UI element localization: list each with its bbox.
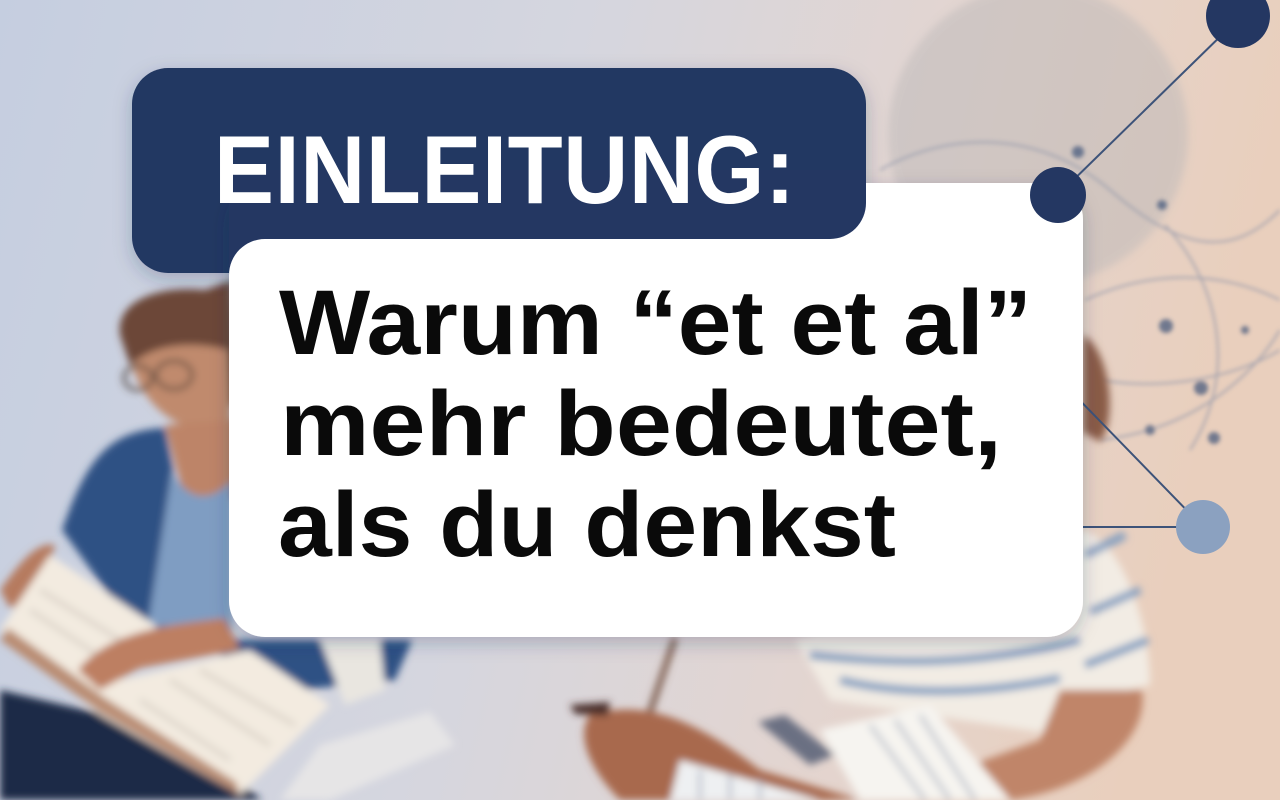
title line 1: Warum “et et al”: [279, 272, 1032, 374]
heading: Einleitung: EINLEITUNG:: [214, 116, 795, 224]
heading label panel: [132, 68, 866, 273]
pen: [650, 638, 675, 712]
left person hair: [120, 280, 240, 420]
left person jacket: [62, 428, 412, 690]
chair: [280, 712, 455, 800]
right person figure, blurred: [570, 335, 1150, 800]
decorative blurred circle: [888, 0, 1188, 285]
left person glasses: [124, 361, 192, 390]
phone: [758, 715, 835, 765]
left person far hand: [0, 544, 55, 608]
left person neck and chest: [165, 420, 240, 500]
left person shirt: [148, 470, 232, 630]
right papers: [670, 760, 820, 800]
right person torso: [795, 530, 1150, 735]
node: top-right dark circle: [1206, 0, 1270, 48]
left person legs: [0, 690, 262, 800]
main title card: [229, 183, 1083, 637]
connector lines: [1058, 25, 1232, 527]
node: light blue circle: [1176, 500, 1230, 554]
right person stripes: [810, 535, 1148, 691]
hand on book: [78, 618, 240, 690]
node: dark circle on card corner: [1030, 167, 1086, 223]
title line 2: mehr bedeutet,: [280, 373, 1002, 475]
navy label overlap above the card: [229, 170, 866, 275]
title line 3: als du denkst: [278, 474, 896, 576]
right person arm: [930, 690, 1143, 800]
right person hair: [1083, 335, 1110, 442]
open book: [0, 555, 330, 795]
left person figure, blurred: [0, 280, 455, 800]
left person face: [132, 345, 232, 430]
network graphic: blurred arcs and nodes: [880, 142, 1280, 450]
book text lines: [30, 590, 295, 760]
